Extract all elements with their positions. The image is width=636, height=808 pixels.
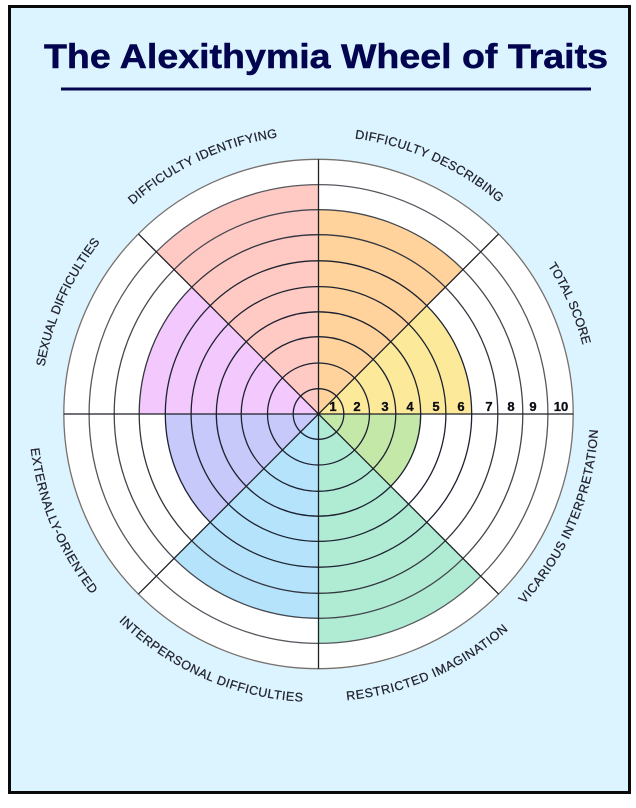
label: difficulty identifying: DIFFICULTY IDENTIFYING	[128, 129, 276, 204]
score rings	[64, 159, 573, 669]
label: restricted imagination: RESTRICTED IMAGINATION	[346, 624, 508, 700]
scale numbers	[329, 399, 568, 414]
wheel chart	[64, 159, 573, 669]
scale numbers: 7	[485, 399, 493, 414]
label: vicarious interpretation: VICARIOUS INTERPRETATION	[518, 430, 598, 602]
scale numbers: 4	[406, 399, 414, 414]
scale numbers: 2	[353, 399, 361, 414]
scale numbers: 3	[381, 399, 389, 414]
sector: difficulty identifying, score 9	[156, 185, 318, 414]
scale numbers: 8	[507, 399, 515, 414]
sector: interpersonal difficulties, score 8	[174, 414, 318, 618]
scale numbers: 1	[329, 399, 337, 414]
label: sexual difficulties: SEXUAL DIFFICULTIES	[36, 238, 99, 366]
sector: sexual difficulties, score 7	[139, 287, 318, 414]
label: difficulty describing: DIFFICULTY DESCRIBING	[356, 130, 503, 202]
scale numbers: 5	[432, 399, 440, 414]
scale numbers: 9	[529, 399, 537, 414]
sector: difficulty describing, score 8	[318, 210, 463, 414]
label: total score: TOTAL SCORE	[549, 261, 591, 345]
sector: externally-oriented, score 6	[165, 414, 318, 522]
sector: vicarious interpretation, score 4	[318, 414, 421, 486]
sector: restricted imagination, score 9	[318, 414, 481, 643]
scale numbers: 6	[457, 399, 465, 414]
sector: total score, score 6	[318, 306, 472, 414]
scale numbers: 10	[554, 399, 568, 414]
title: The Alexithymia Wheel of Traits	[44, 38, 608, 76]
sector spokes	[64, 159, 573, 669]
wheel base disc	[64, 159, 573, 669]
label: interpersonal difficulties: INTERPERSONAL DIFFICULTIES	[120, 616, 302, 702]
label: externally-oriented: EXTERNALLY-ORIENTED	[30, 448, 96, 592]
title underline	[61, 88, 591, 90]
